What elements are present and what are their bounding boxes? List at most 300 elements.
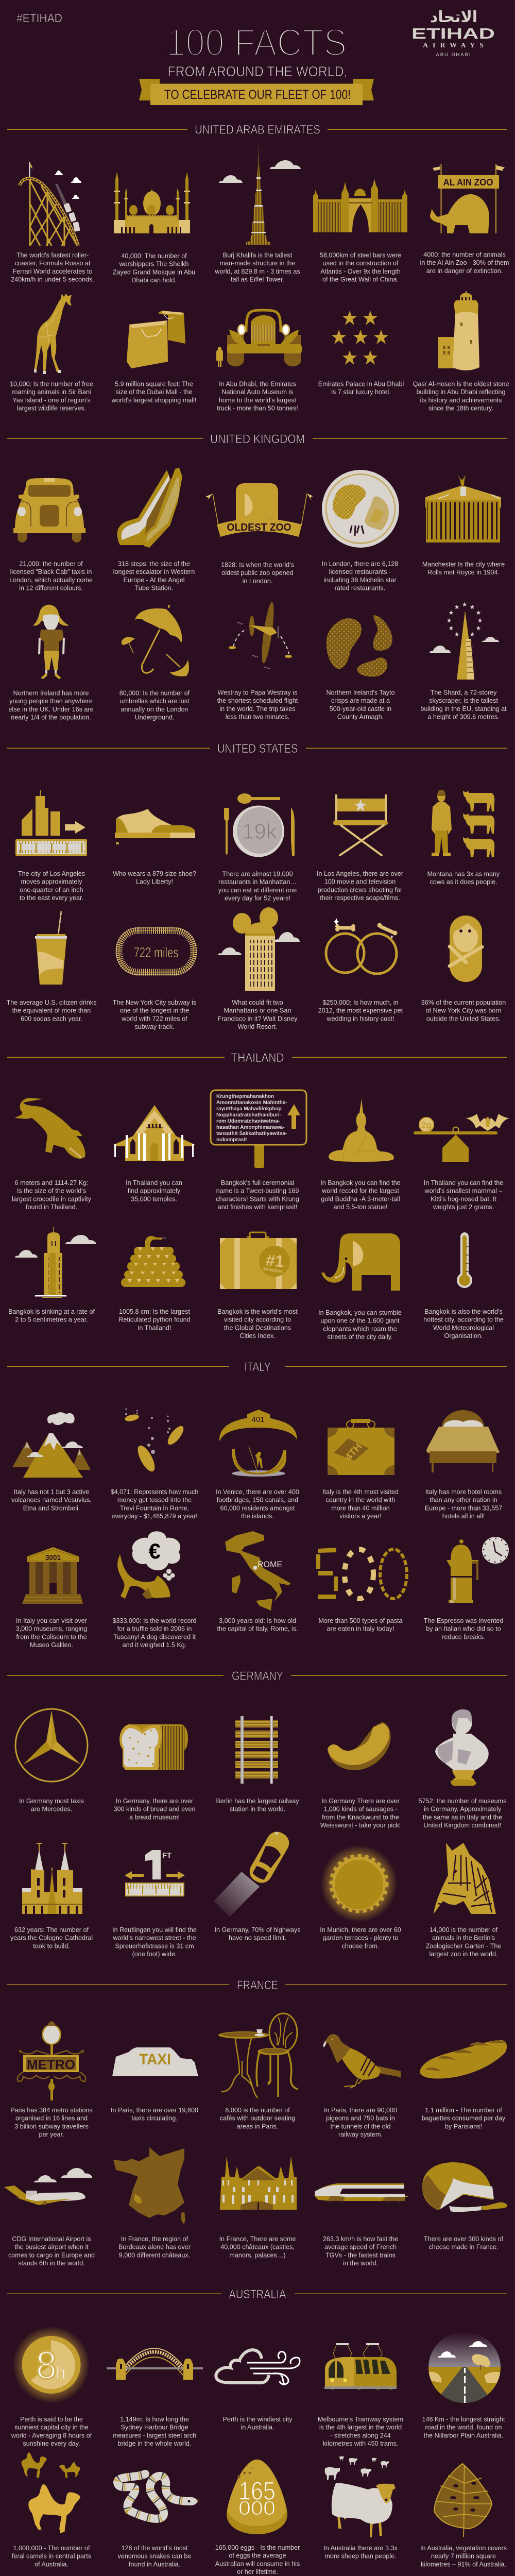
caption: or her lifetime.: [237, 2568, 278, 2575]
icon: suitcase fourth: [328, 1419, 394, 1475]
caption: London, which actually come: [9, 577, 93, 584]
icon: egg 165000: [227, 2460, 287, 2534]
caption: restaurants in Manhattan…: [218, 878, 297, 886]
caption: rated restaurants.: [335, 585, 385, 592]
icon: 722 miles track: 722 miles: [134, 944, 178, 960]
caption: their respective soaps/films.: [320, 894, 400, 902]
icon: Burj Khalifa: [219, 143, 301, 245]
caption: The average U.S. citizen drinks: [6, 999, 97, 1006]
icon: elephant with Oldest Zoo banner: OLDEST ZOO: [227, 522, 291, 533]
icon: taxi sign: [112, 2047, 198, 2076]
icon: Paris metro sign: METRO: [27, 2058, 75, 2072]
caption: Bangkok is the world's most: [217, 1308, 298, 1315]
icon: giant truck with person: [216, 310, 302, 367]
caption: worshippers The Sheikh: [119, 261, 188, 268]
caption: 8,000 is the number of: [225, 2107, 290, 2114]
caption: the Global Destinations: [224, 1324, 291, 1331]
caption: 3 billion subway travellers: [14, 2123, 89, 2130]
caption: 126 of the world's most: [121, 2545, 188, 2552]
panel: Italy: [7, 1360, 509, 1649]
caption: 3,000 years old: Is how old: [219, 1617, 296, 1624]
icon: rhino at Al Ain Zoo: [430, 164, 505, 233]
caption: more than 40 million: [331, 1504, 390, 1512]
caption: Westray to Papa Westray is: [218, 689, 297, 697]
logo: Etihad Airways: ETIHAD: [411, 26, 495, 42]
icon: soda cup: [35, 911, 67, 985]
icon: 722 miles track: [116, 928, 196, 975]
caption: truck - more than 50 tonnes!: [217, 405, 298, 412]
icon: 500 made of pasta: [316, 1548, 407, 1599]
icon: director's chair: [333, 794, 388, 855]
icon: railway track: [235, 1716, 278, 1784]
caption: Atlantis - Over 9x the length: [320, 268, 401, 275]
caption: world's narrowest street - the: [112, 1935, 196, 1942]
caption: In France, There are some: [219, 2235, 296, 2243]
caption: footbridges, 150 canals, and: [217, 1497, 298, 1504]
caption: to the east every year.: [20, 894, 83, 902]
heading: UNITED STATES: [217, 742, 298, 756]
icon: cargo plane at CDG: [4, 2168, 92, 2205]
caption: 9,000 different châteaux.: [119, 2251, 190, 2259]
caption: In Thailand you can: [126, 1179, 182, 1187]
heading: UNITED KINGDOM: [210, 432, 305, 446]
caption: size of the Dubai Mall - the: [115, 388, 193, 396]
icon: museum 3001: 3001: [45, 1553, 61, 1562]
caption: organised in 16 lines and: [15, 2115, 88, 2122]
caption: In London, there are 6,128: [322, 561, 398, 568]
icon: suitcase number one Bangkok: [220, 1232, 297, 1289]
caption: in 12 different colours.: [19, 585, 83, 592]
caption: - stretches along 244: [330, 2432, 391, 2439]
caption: choose from.: [342, 1942, 379, 1950]
caption: Paris has 384 metro stations: [10, 2107, 93, 2114]
caption: In Paris, there are 90,000: [324, 2107, 397, 2114]
icon: grand mosque: [114, 172, 190, 233]
icon: swaddled baby: [450, 916, 482, 982]
icon: Melbourne tram: [324, 2343, 397, 2389]
icon: giant elephant: [321, 1233, 400, 1291]
caption: its history and achievements: [420, 397, 502, 404]
caption: umbrellas which are lost: [119, 698, 190, 705]
icon: egg 165000: 165: [238, 2477, 276, 2505]
caption: The Espresso was invented: [424, 1617, 503, 1624]
icon: venomous snake: [117, 2474, 199, 2519]
caption: 40,000: The number of: [121, 252, 187, 260]
caption: bridge in the whole world.: [118, 2440, 191, 2447]
icon: reticulated python: [121, 1236, 185, 1287]
caption: average speed of French: [324, 2244, 397, 2251]
caption: 263.3 km/h is how fast the: [323, 2235, 398, 2243]
icon: short flight plane: [229, 601, 292, 669]
caption: CDG International Airport is: [12, 2235, 91, 2243]
icon: TGV train: [315, 2183, 408, 2201]
icon: plate with 19k: [224, 793, 295, 857]
caption: 1005.8 cm: Is the largest: [119, 1308, 190, 1315]
caption: station in the world.: [230, 1806, 285, 1813]
caption: The Shard, a 72-storey: [431, 689, 497, 697]
caption: largest wildlife reserves.: [17, 405, 86, 412]
caption: In Thailand you can find the: [424, 1179, 503, 1187]
caption: largest crocodile in captivity: [12, 1195, 92, 1202]
caption: are eaten in Italy today!: [327, 1625, 394, 1633]
caption: measures - largest steel arch: [113, 2432, 196, 2439]
caption: Tube Station.: [135, 585, 173, 592]
caption: Weisswurst - take your pick!: [320, 1822, 401, 1829]
icon: Bangkok ceremonial name sign: [211, 1090, 306, 1168]
icon: Bangkok ceremonial name sign: hasathan Amonphimanawa-: [216, 1125, 284, 1130]
caption: Northern Ireland has more: [13, 689, 89, 697]
icon: Bangkok ceremonial name sign: nukamprasit: [216, 1137, 247, 1143]
caption: Melbourne's Tramway system: [318, 2416, 403, 2423]
caption: In Germany, 70% of highways: [214, 1926, 301, 1934]
icon: Bangkok ceremonial name sign: Noppharatratchathaniburi-: [216, 1112, 281, 1118]
caption: Europe - At the Angel: [123, 577, 185, 584]
caption: by an Italian who did so to: [426, 1625, 501, 1633]
caption: hottest city, according to the: [423, 1316, 504, 1324]
icon: scale with coin and bat: 2g: [421, 1120, 432, 1130]
caption: stands 6th in the world.: [18, 2260, 85, 2267]
icon: Bangkok ceremonial name sign: Amonrattanakosin Mahintha-: [216, 1100, 287, 1106]
caption: Sydney Harbour Bridge: [121, 2424, 188, 2431]
caption: of eggs the average: [229, 2552, 286, 2560]
caption: skyscraper, is the tallest: [429, 697, 498, 704]
icon: sun with 8 hours: [12, 2326, 90, 2403]
caption: 2 to 5 centimetres a year.: [15, 1316, 88, 1324]
caption: United Kingdom combined!: [423, 1822, 502, 1829]
icon: Bangkok ceremonial name sign: rom Udomratchaniwetma-: [216, 1118, 280, 1124]
icon: sausage: [328, 1722, 391, 1770]
caption: elephants which roam the: [323, 1325, 397, 1332]
icon: black cab: [13, 478, 85, 543]
caption: from the Knackwurst to the: [322, 1814, 399, 1821]
subtitle: FROM AROUND THE WORLD,: [168, 63, 347, 79]
caption: in the Al Ain Zoo - 30% of them: [420, 259, 509, 266]
caption: 6 meters and 1114.27 Kg:: [14, 1179, 89, 1187]
caption: subway track.: [135, 1023, 174, 1030]
caption: longest escalator in Western: [113, 568, 195, 575]
caption: Zoologischer Garten - The: [426, 1942, 501, 1950]
caption: taxis circulating.: [131, 2115, 178, 2122]
caption: 1.1 million - The number of: [425, 2107, 502, 2114]
icon: espresso pot and clock: [447, 1537, 509, 1603]
caption: Berlin has the largest railway: [216, 1798, 299, 1805]
caption: less than two minutes.: [226, 714, 289, 721]
caption: else in the UK. Under 16s are: [8, 706, 94, 713]
caption: country in the world with: [325, 1497, 396, 1504]
icon: thermometer: [457, 1232, 472, 1288]
icon: man and three cows: [432, 790, 494, 857]
icon: suitcase number one Bangkok: BANGKOK: [263, 1266, 284, 1274]
icon: sheep: [325, 2456, 396, 2537]
caption: everyday - $1,485,879 a year!: [111, 1513, 198, 1520]
logo: Etihad Airways: ABU DHABI: [436, 52, 471, 58]
icon: wedding rings with bones: [326, 918, 398, 974]
caption: money get tossed into the: [117, 1497, 192, 1504]
icon: map of Italy with Rome: [225, 1531, 290, 1611]
caption: Kitti's hog-nosed bat. It: [431, 1195, 496, 1202]
title: 100 FACTS: [166, 21, 347, 64]
icon: rhino at Al Ain Zoo: AL AIN ZOO: [443, 177, 493, 188]
caption: and finishes with kamprasit!: [218, 1204, 297, 1211]
caption: building in the EU, standing at: [420, 705, 507, 713]
caption: since the 18th century.: [428, 405, 493, 412]
caption: Northern Ireland's Tayto: [326, 689, 395, 697]
caption: streets of the city daily.: [327, 1333, 393, 1341]
icon: suitcase number one Bangkok: #1: [265, 1251, 285, 1271]
caption: took to build.: [33, 1942, 70, 1950]
caption: In Venice, there are over 400: [216, 1488, 299, 1496]
caption: the shortest scheduled flight: [217, 697, 298, 704]
caption: is 7 star luxury hotel.: [331, 388, 391, 396]
caption: sunniest capital city in the: [14, 2424, 89, 2431]
caption: in Germany. Approximately: [424, 1806, 502, 1813]
caption: including 36 Michelin star: [323, 577, 397, 584]
caption: and 5.5-ton statue!: [333, 1204, 388, 1211]
icon: truffle dog: [117, 1531, 180, 1599]
icon: gold Buddha: [329, 1099, 394, 1162]
caption: County Armagh.: [337, 714, 384, 721]
heading: UNITED ARAB EMIRATES: [195, 123, 320, 137]
caption: building in Abu Dhabi reflecting: [417, 388, 505, 396]
caption: visitors a year!: [339, 1513, 382, 1520]
caption: In Germany, there are over: [116, 1798, 193, 1805]
caption: the capital of Italy, Rome, is.: [217, 1625, 298, 1633]
caption: 4000: the number of animals: [423, 251, 506, 259]
caption: world record for the largest: [321, 1188, 399, 1195]
caption: world's largest shopping mall!: [111, 397, 196, 404]
caption: of the Great Wall of China.: [322, 276, 399, 283]
ribbon: [139, 79, 374, 105]
caption: 100 movie and television: [324, 878, 396, 886]
caption: $4,071: Represents how much: [111, 1488, 198, 1496]
icon: Bangkok ceremonial name sign: Krungthepmahanakhon: [216, 1094, 274, 1099]
icon: umbrellas: [122, 605, 189, 676]
caption: Bangkok's full ceremonial: [221, 1179, 294, 1187]
caption: Europe - more than 33,557: [425, 1504, 502, 1512]
panel: France: [4, 1978, 507, 2267]
icon: feral camels: [22, 2452, 80, 2533]
icon: Sydney Harbour Bridge: [107, 2348, 203, 2380]
icon: roller coaster: [20, 162, 81, 246]
caption: world - Averaging 8 hours of: [11, 2432, 92, 2439]
icon: sun with 8 hours: 8: [36, 2344, 57, 2387]
caption: 500-year-old castle in: [330, 705, 391, 713]
caption: and it weighed 1.5 Kg.: [123, 1641, 186, 1649]
icon: Bangkok ceremonial name sign: rayutthaya Mahadilokphop: [216, 1106, 282, 1112]
caption: per year.: [39, 2131, 64, 2138]
caption: in Thailand!: [138, 1324, 171, 1331]
caption: largest zoo in the world.: [429, 1951, 498, 1958]
icon: cafe table and chair: [218, 2013, 298, 2098]
icon: Rolls-Royce grille: [425, 475, 501, 543]
caption: Montana has 3x as many: [427, 871, 500, 878]
caption: road in the world, found on: [425, 2424, 502, 2431]
caption: Bangkok is also the world's: [424, 1308, 503, 1315]
icon: sinking Baiyoke tower: [15, 1227, 96, 1298]
caption: characters! Starts with Krung: [216, 1195, 299, 1202]
caption: 40,000 châteaux (castles,: [220, 2244, 295, 2251]
caption: used in the construction of: [322, 260, 399, 267]
caption: The world's fastest roller-: [16, 251, 89, 259]
hashtag: #ETIHAD: [16, 11, 62, 25]
caption: 318 steps: the size of the: [118, 561, 190, 568]
caption: (one foot) wide.: [132, 1951, 177, 1958]
caption: nearly 7 million square: [431, 2553, 496, 2560]
caption: volcanoes named Vesuvius,: [11, 1497, 92, 1504]
caption: young people than anywhere: [9, 698, 93, 705]
caption: find approximately: [128, 1188, 181, 1195]
caption: world's smallest mammal –: [424, 1188, 502, 1195]
caption: There are almost 19,000: [222, 871, 293, 878]
panel: Australia: [7, 2287, 507, 2575]
caption: Etna and Stromboli.: [23, 1504, 80, 1512]
caption: wedding in history cost!: [327, 1015, 394, 1022]
caption: Cities Index.: [239, 1332, 276, 1340]
icon: one foot narrow street: FT: [162, 1851, 171, 1860]
icon: speeding car: [214, 1828, 293, 1917]
caption: coaster, Formula Rosso at: [14, 260, 91, 267]
caption: production crews shooting for: [318, 886, 402, 893]
caption: In France, the region of: [121, 2235, 188, 2243]
icon: Mercedes star: [15, 1709, 88, 1782]
icon: Cologne cathedral: [22, 1843, 82, 1914]
caption: cafés with outdoor seating: [220, 2115, 295, 2122]
caption: Spreuerhofstrasse is 31 cm: [115, 1942, 194, 1950]
icon: three volcanoes: [12, 1412, 91, 1478]
caption: $333,000: Is the world record: [112, 1617, 197, 1624]
caption: What could fit two: [232, 999, 283, 1006]
icon: Trevi fountain coins: [124, 1409, 186, 1474]
caption: cows as it does people.: [430, 878, 497, 886]
icon: shopping bags: [127, 311, 185, 368]
caption: the equivalent of more than: [12, 1007, 91, 1014]
caption: 80,000: Is the number of: [119, 689, 190, 697]
caption: areas in Paris.: [237, 2123, 278, 2130]
caption: more sheep than people.: [324, 2553, 397, 2560]
heading: ITALY: [244, 1360, 271, 1374]
icon: plate with 19k: 19k: [242, 819, 278, 843]
icon: sliced bread: [119, 1724, 188, 1770]
caption: Manchester Is the city where: [422, 561, 505, 568]
panel: United Kingdom: [7, 432, 507, 721]
caption: for a truffle sold in 2005 in: [117, 1625, 192, 1633]
caption: Australian will consume in his: [215, 2560, 300, 2567]
icon: fish and chips plate: [322, 470, 399, 548]
icon: museum bust: [435, 1709, 489, 1786]
caption: 14,000 is the number of: [430, 1926, 498, 1934]
caption: the tunnels of the old: [331, 2123, 390, 2130]
caption: name is a Tweet-busting 169: [216, 1188, 299, 1195]
caption: you can eat at different one: [218, 887, 297, 894]
caption: oldest public zoo opened: [221, 569, 294, 577]
icon: one foot narrow street: [125, 1850, 185, 1896]
caption: The city of Los Angeles: [18, 870, 85, 877]
caption: TGVs - the fastest trains: [325, 2251, 396, 2259]
caption: In Bangkok you can find the: [320, 1179, 401, 1187]
caption: 36% of the current population: [421, 999, 506, 1006]
caption: 300 kinds of bread and even: [114, 1806, 195, 1813]
caption: pigeons and 750 bats in: [326, 2115, 395, 2122]
caption: kilometres – 91% of Australia.: [421, 2561, 506, 2568]
caption: Underground.: [134, 714, 175, 721]
caption: More than 500 types of pasta: [318, 1617, 403, 1624]
icon: monstera leaf: [434, 2464, 492, 2537]
caption: Ferrari World accelerates to: [12, 268, 93, 275]
caption: a bread museum!: [129, 1814, 180, 1821]
caption: outside the United States.: [426, 1015, 501, 1022]
caption: Qasr Al-Hosen is the oldest stone: [413, 380, 509, 387]
panel: United Arab Emirates: [7, 123, 509, 412]
caption: Tuscany! A dog discovered it: [113, 1633, 196, 1640]
caption: found in Australia.: [129, 2561, 180, 2568]
caption: Perth is said to be the: [20, 2416, 83, 2423]
icon: Qasr Al-Hosen tower: [438, 291, 479, 370]
icon: Atlantis hotel: [313, 179, 407, 232]
caption: In Munich, there are over 60: [320, 1926, 401, 1934]
caption: There are over 300 kinds of: [424, 2235, 504, 2243]
caption: Reticulated python found: [118, 1316, 191, 1324]
caption: In Reutlingen you will find the: [112, 1926, 197, 1934]
icon: taxi sign: TAXI: [139, 2051, 171, 2068]
caption: Manhattans or one San: [224, 1007, 291, 1014]
icon: giant shoe: [115, 809, 195, 844]
caption: one-quarter of an inch: [20, 886, 83, 893]
caption: licensed "Black Cab" taxis in: [10, 568, 92, 575]
caption: 10,000: Is the number of free: [10, 380, 93, 387]
heading: THAILAND: [231, 1051, 284, 1065]
icon: map of France with Bordeaux: [113, 2147, 185, 2224]
icon: cheese and knife: [422, 2162, 507, 2212]
caption: comes to cargo in Europe and: [8, 2251, 95, 2259]
caption: 3,000 museums, ranging: [16, 1625, 87, 1633]
caption: every day for 52 years!: [225, 895, 290, 902]
caption: roaming animals in Sir Bani: [12, 388, 91, 396]
caption: found in Thailand.: [26, 1204, 77, 1211]
icon: chateau: [220, 2156, 297, 2210]
caption: 240km/h in under 5 seconds.: [11, 276, 94, 283]
icon: hotel bed: [426, 1410, 500, 1472]
icon: Venice bridge and gondola: 401: [251, 1415, 265, 1424]
caption: baguettes consumed per day: [422, 2115, 506, 2122]
caption: In Abu Dhabi, the Emirates: [219, 380, 296, 387]
caption: Perth is the windiest city: [222, 2416, 293, 2423]
caption: Museo Galileo.: [30, 1641, 73, 1649]
caption: of Australia.: [35, 2561, 68, 2568]
icon: sun with 8 hours: h: [56, 2363, 65, 2383]
caption: have no speed limit.: [229, 1935, 286, 1942]
caption: In Paris, there are over 19,600: [111, 2107, 198, 2114]
caption: garden terraces - plenty to: [322, 1935, 399, 1942]
caption: tall as Eiffel Tower.: [231, 276, 284, 283]
caption: weights just 2 grams.: [433, 1204, 494, 1211]
caption: 1828: Is when the world's: [221, 562, 294, 569]
caption: crisps are made at a: [331, 697, 390, 704]
caption: In Germany most taxis: [19, 1798, 84, 1805]
caption: Italy has more hotel rooms: [425, 1488, 502, 1496]
caption: $250,000: Is how much, in: [322, 999, 399, 1006]
icon: Thai temple: [114, 1105, 195, 1161]
caption: 58,000km of steel bars were: [320, 251, 401, 259]
caption: animals in the Berlin's: [432, 1935, 495, 1942]
heading: GERMANY: [232, 1669, 283, 1683]
panel: United States: [6, 742, 507, 1030]
caption: World Resort.: [238, 1023, 277, 1030]
caption: 165,000 eggs - Is the number: [215, 2544, 300, 2551]
header: hashtag, logo, title and ribbon: [16, 8, 495, 105]
caption: the same as in Italy and the: [423, 1814, 502, 1821]
icon: sun over terraces: [320, 1845, 398, 1922]
caption: gold Buddha -A 3-meter-tall: [321, 1195, 400, 1202]
